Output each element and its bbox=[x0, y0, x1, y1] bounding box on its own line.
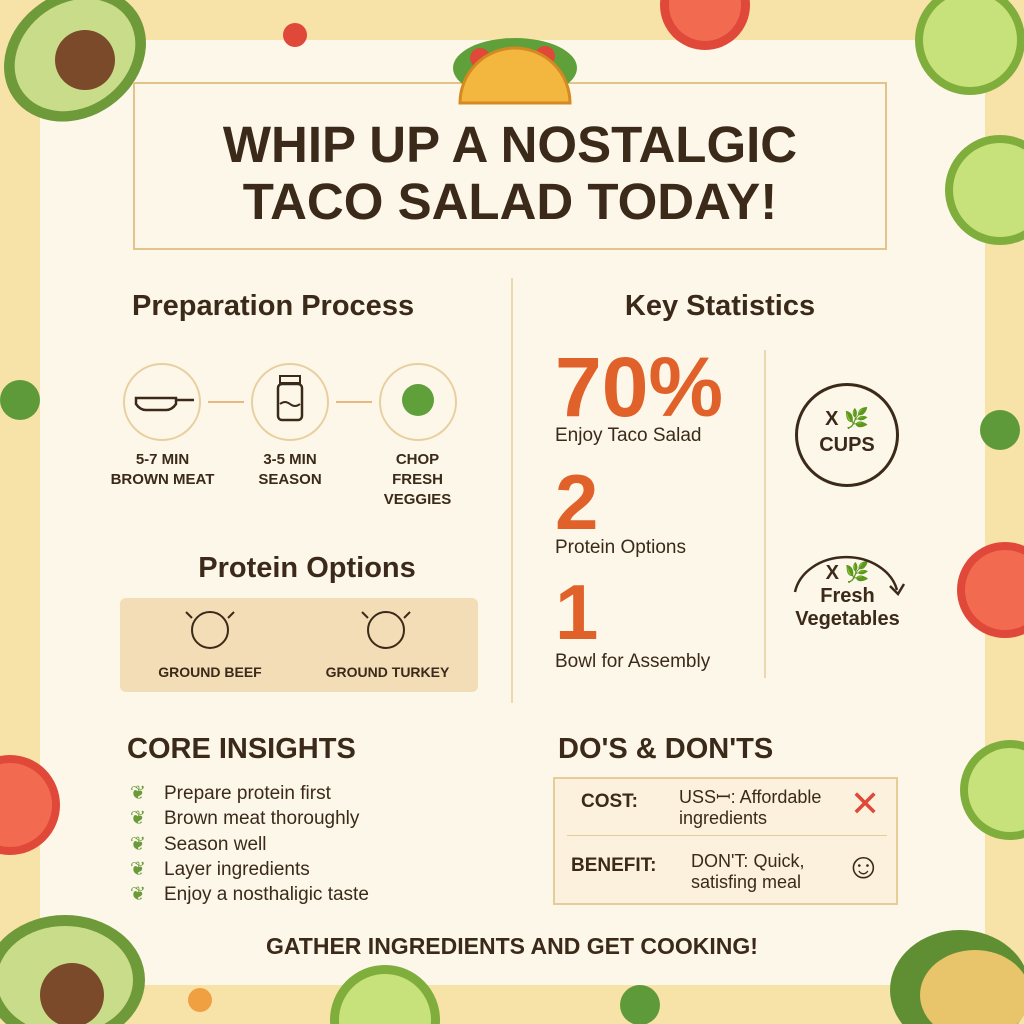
dos table: BENEFIT: bbox=[571, 855, 656, 876]
insights list: ❦ bbox=[130, 808, 146, 829]
prep steps: 3-5 MIN bbox=[263, 451, 317, 468]
stats: 70% bbox=[555, 340, 723, 434]
stats: Bowl for Assembly bbox=[555, 651, 710, 672]
prep steps: 5-7 MIN bbox=[136, 451, 189, 468]
stats: Enjoy Taco Salad bbox=[555, 425, 701, 446]
insights list: Prepare protein first bbox=[164, 783, 331, 804]
divider bbox=[511, 278, 513, 703]
dos table: DON'T: Quick, bbox=[691, 851, 804, 871]
title: WHIP UP A NOSTALGIC bbox=[223, 116, 797, 173]
footer: GATHER INGREDIENTS AND GET COOKING! bbox=[266, 933, 758, 959]
prep steps: SEASON bbox=[258, 471, 322, 488]
insights list: Layer ingredients bbox=[164, 859, 310, 880]
dos table: satisfing meal bbox=[691, 872, 801, 892]
icon: taco bbox=[453, 38, 577, 104]
title box bbox=[133, 82, 887, 250]
stats: Protein Options bbox=[555, 537, 686, 558]
fresh vegetables: Vegetables bbox=[795, 608, 900, 630]
cups badge: X 🌿 bbox=[825, 408, 869, 430]
insights list bbox=[130, 783, 369, 905]
heading: preparation: Preparation Process bbox=[132, 290, 414, 322]
dos table: ingredients bbox=[679, 808, 767, 828]
insights list: Brown meat thoroughly bbox=[164, 808, 359, 829]
dos table: ✕ bbox=[850, 783, 880, 824]
stats: 2 bbox=[555, 458, 598, 546]
title: TACO SALAD TODAY! bbox=[243, 173, 777, 230]
dos table: USSꟷ: Affordable bbox=[679, 787, 821, 807]
dos table: COST: bbox=[581, 791, 638, 812]
stats bbox=[555, 340, 723, 672]
protein panel bbox=[120, 598, 478, 692]
heading: dos and donts: DO'S & DON'TS bbox=[558, 733, 773, 765]
insights list: Season well bbox=[164, 834, 266, 855]
protein panel: GROUND TURKEY bbox=[326, 664, 449, 680]
protein panel: GROUND BEEF bbox=[158, 664, 262, 680]
fresh vegetables: Fresh bbox=[820, 585, 875, 607]
insights list: Enjoy a nosthaligic taste bbox=[164, 884, 369, 905]
prep steps bbox=[111, 363, 457, 508]
insights list: ❦ bbox=[130, 834, 146, 855]
cups badge: CUPS bbox=[819, 434, 875, 456]
heading: key statistics: Key Statistics bbox=[625, 290, 815, 322]
insights list: ❦ bbox=[130, 783, 146, 804]
heading: core insights: CORE INSIGHTS bbox=[127, 733, 356, 765]
cups badge bbox=[795, 383, 899, 487]
insights list: ❦ bbox=[130, 884, 146, 905]
stats: 1 bbox=[555, 568, 598, 656]
fresh vegetables: X 🌿 bbox=[826, 562, 869, 584]
title bbox=[222, 116, 797, 230]
prep steps: FRESH bbox=[392, 471, 443, 488]
dos table: ☺ bbox=[845, 845, 882, 886]
insights list: ❦ bbox=[130, 859, 146, 880]
prep steps: VEGGIES bbox=[384, 491, 451, 508]
prep steps: BROWN MEAT bbox=[111, 471, 214, 488]
heading: protein: Protein Options bbox=[198, 552, 416, 584]
fresh vegetables bbox=[794, 556, 905, 630]
prep steps: CHOP bbox=[396, 451, 439, 468]
dos table bbox=[553, 777, 898, 905]
